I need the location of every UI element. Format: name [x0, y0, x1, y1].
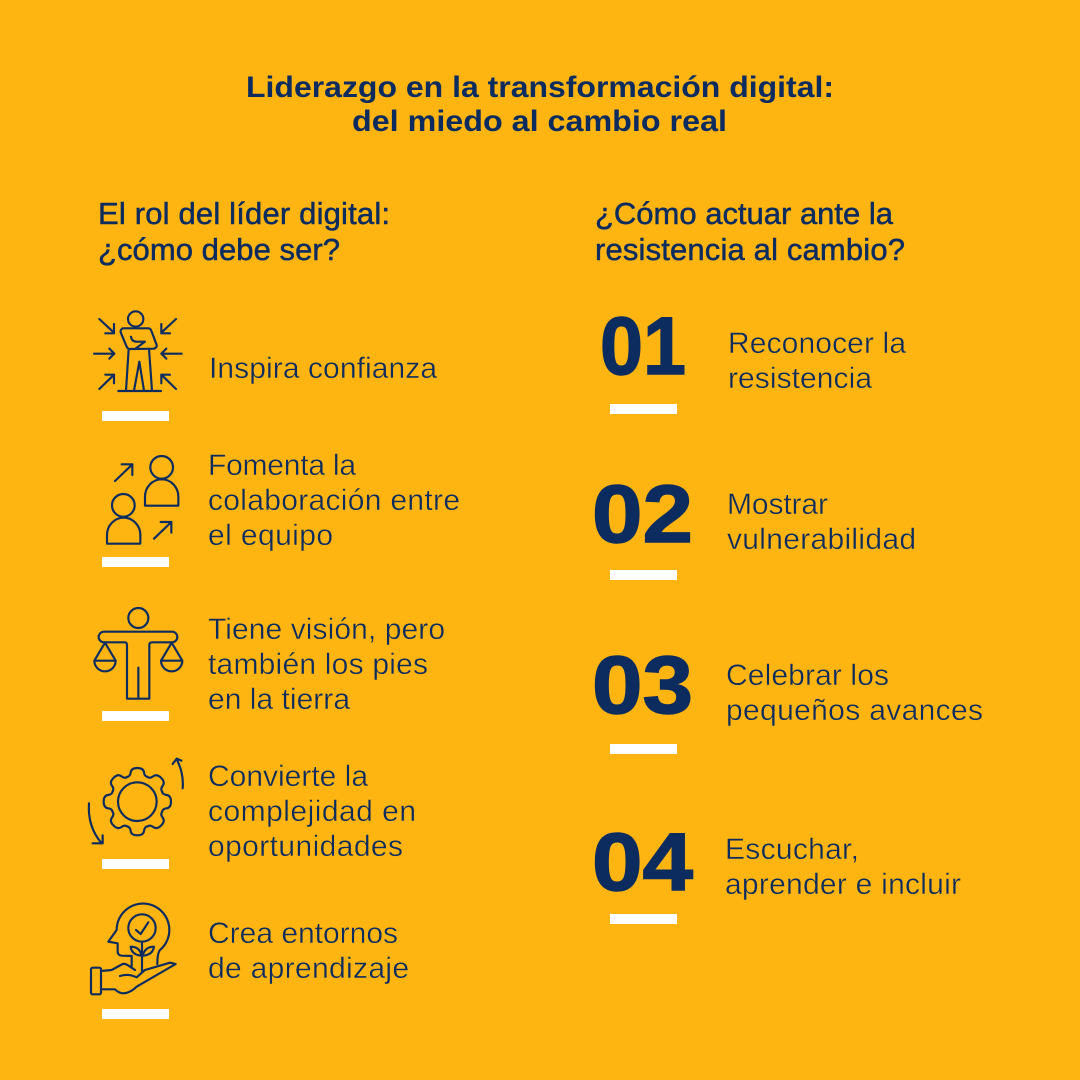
number 01: 01 — [600, 301, 686, 392]
number 02: 02 — [592, 469, 693, 560]
text: mostrar vulnerabilidad: Mostrar — [727, 488, 828, 521]
text: fomenta la colaboración: colaboración entre — [208, 484, 460, 517]
text: convierte la complejidad: Convierte la — [208, 760, 368, 793]
text: tiene visión: en la tierra — [208, 683, 350, 716]
heading: el rol del líder digital — [98, 196, 390, 267]
divider bar — [610, 744, 677, 754]
text: celebrar los pequeños avances — [726, 659, 983, 727]
number 04: 04 — [592, 817, 693, 908]
heading: cómo actuar ante la resistencia: ¿Cómo actuar ante la — [595, 196, 894, 231]
text: crea entornos: de aprendizaje — [208, 952, 409, 985]
title: Liderazgo en la transformación digital: — [246, 71, 834, 104]
icon: gear with rotating arrows — [89, 759, 183, 843]
text: fomenta la colaboración: el equipo — [208, 519, 333, 552]
text: escuchar, aprender e incluir: Escuchar, — [725, 833, 859, 866]
divider bar — [610, 570, 677, 580]
icon: person as balance scale — [94, 608, 182, 699]
divider bar — [610, 404, 677, 414]
text: fomenta la colaboración: Fomenta la — [208, 449, 356, 482]
text: crea entornos — [208, 917, 409, 985]
text: celebrar los pequeños avances: pequeños avances — [726, 694, 983, 727]
number 03: 03 — [592, 640, 693, 731]
text: convierte la complejidad — [208, 760, 416, 863]
text: celebrar los pequeños avances: Celebrar los — [726, 659, 889, 692]
text: convierte la complejidad: complejidad en — [208, 795, 416, 828]
text: mostrar vulnerabilidad: vulnerabilidad — [727, 523, 916, 556]
divider bar — [610, 914, 677, 924]
title: del miedo al cambio real — [352, 105, 727, 138]
text: fomenta la colaboración — [208, 449, 460, 552]
divider bar — [102, 711, 169, 721]
text: inspira confianza: Inspira confianza — [209, 352, 437, 385]
divider bar — [102, 557, 169, 567]
divider bar — [102, 859, 169, 869]
text: reconocer la resistencia: Reconocer la — [728, 327, 906, 360]
text: tiene visión — [208, 613, 445, 716]
text: tiene visión: Tiene visión, pero — [208, 613, 445, 646]
divider bar — [102, 1009, 169, 1019]
heading: cómo actuar ante la resistencia: resistencia al cambio? — [595, 232, 905, 267]
text: convierte la complejidad: oportunidades — [208, 830, 403, 863]
heading: el rol del líder digital: ¿cómo debe ser? — [98, 232, 340, 267]
text: escuchar, aprender e incluir: aprender e incluir — [725, 868, 961, 901]
text: tiene visión: también los pies — [208, 648, 428, 681]
text: escuchar, aprender e incluir — [725, 833, 961, 901]
text: reconocer la resistencia: resistencia — [728, 362, 872, 395]
divider bar — [102, 411, 169, 421]
icon: two people with arrows — [107, 456, 178, 544]
heading: el rol del líder digital: El rol del líder digital: — [98, 196, 390, 231]
text: mostrar vulnerabilidad — [727, 488, 916, 556]
heading: cómo actuar ante la resistencia — [595, 196, 905, 267]
icon: leader with arrows — [94, 311, 182, 391]
title — [246, 71, 834, 138]
text: crea entornos: Crea entornos — [208, 917, 398, 950]
text: reconocer la resistencia — [728, 327, 906, 395]
icon: head, plant and hand — [91, 904, 176, 994]
